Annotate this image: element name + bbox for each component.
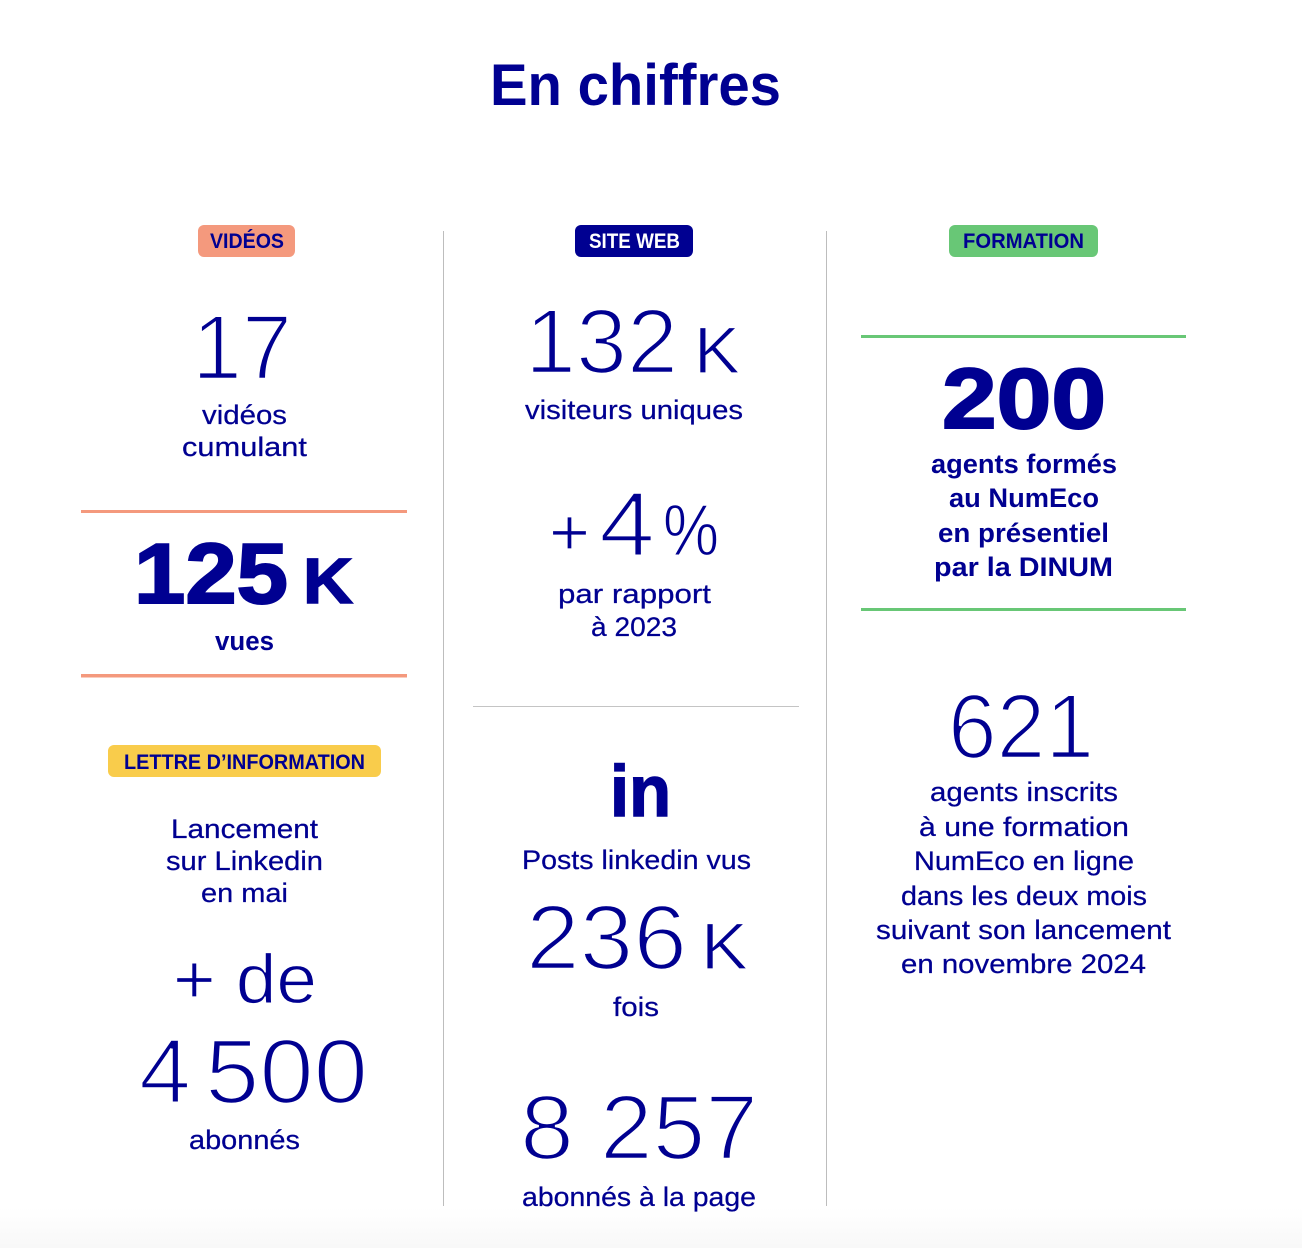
highlighted stat: 125 K vues: [81, 510, 407, 678]
tag: site web: [575, 225, 693, 257]
stat: 8 257 abonnés à la page: 8: [520, 1077, 574, 1179]
text: agents inscrits: suivant son lancement: [876, 915, 1172, 945]
stat: +4 % par rapport à 2023: [549, 474, 719, 642]
text: agents inscrits: agents inscrits: [930, 777, 1118, 807]
stat: 236 K fois: fois: [613, 992, 659, 1022]
text: vidéos cumulant: cumulant: [182, 432, 308, 462]
panel: formation: [861, 225, 1186, 979]
tag: lettre d'information: LETTRE D’INFORMATION: [124, 751, 365, 774]
icon: linkedin: in: [610, 752, 671, 832]
stat: 132 K visiteurs uniques: visiteurs uniques: [525, 395, 743, 425]
highlighted stat: 200 agents formés: en présentiel: [938, 518, 1109, 548]
stat: +4 % par rapport à 2023: à 2023: [591, 612, 677, 642]
stat: 621: 621: [948, 676, 1094, 778]
title: En chiffres: [490, 53, 781, 118]
stat: plus de 4 500 abonnés: + de: [173, 940, 317, 1018]
highlighted stat: 125 K vues: 125: [134, 527, 288, 622]
stat: 8 257 abonnés à la page: [520, 1077, 758, 1212]
highlighted stat: 200 agents formés: au NumEco: [949, 483, 1099, 513]
stat: 8 257 abonnés à la page: 257: [600, 1077, 758, 1179]
stat: 132 K visiteurs uniques: 132: [525, 291, 678, 393]
highlighted stat: 125 K vues: vues: [215, 626, 274, 656]
text: vidéos cumulant: [182, 400, 308, 462]
tag: formation: FORMATION: [963, 230, 1084, 253]
stat: +4 % par rapport à 2023: 4: [599, 474, 655, 576]
text: agents inscrits: NumEco en ligne: [914, 846, 1134, 876]
text: lancement: en mai: [201, 878, 288, 908]
stat: plus de 4 500 abonnés: 500: [205, 1021, 368, 1123]
stat: plus de 4 500 abonnés: [139, 940, 368, 1155]
stat: 236 K fois: K: [701, 909, 748, 983]
tag: vidéos: [198, 225, 295, 257]
text: posts linkedin vus: Posts linkedin vus: [522, 845, 751, 875]
stat: plus de 4 500 abonnés: abonnés: [189, 1125, 300, 1155]
highlighted stat: 200 agents formés: agents formés: [931, 449, 1117, 479]
stat: 236 K fois: [526, 887, 748, 1022]
stat: 236 K fois: 236: [526, 887, 687, 989]
stat: plus de 4 500 abonnés: 4: [139, 1021, 191, 1123]
panel: vidéos: [81, 225, 407, 678]
tag: lettre d'information: [108, 745, 381, 777]
stat: +4 % par rapport à 2023: par rapport: [558, 579, 712, 609]
highlighted stat: 200 agents formés: par la DINUM: [934, 552, 1113, 582]
text: lancement: Lancement: [171, 814, 319, 844]
panel: lettre d'information: [108, 745, 381, 1155]
panel: site web: [520, 225, 758, 1212]
stat: +4 % par rapport à 2023: +: [549, 495, 590, 569]
text: vidéos cumulant: vidéos: [202, 400, 287, 430]
highlighted stat: 125 K vues: K: [303, 545, 353, 617]
text: agents inscrits: en novembre 2024: [901, 949, 1146, 979]
text: agents inscrits: [876, 777, 1172, 979]
stat: +4 % par rapport à 2023: %: [663, 491, 719, 571]
text: lancement: [166, 814, 323, 908]
stat: 132 K visiteurs uniques: K: [694, 313, 740, 387]
highlighted stat: 200 agents formés: 200: [942, 352, 1106, 447]
text: agents inscrits: dans les deux mois: [901, 881, 1147, 911]
stat: 8 257 abonnés à la page: abonnés à la page: [522, 1182, 756, 1212]
text: lancement: sur Linkedin: [166, 846, 323, 876]
highlighted stat: 200 agents formés: [861, 335, 1186, 611]
stat: 132 K visiteurs uniques: [525, 291, 743, 425]
tag: formation: [949, 225, 1098, 257]
tag: site web: SITE WEB: [589, 230, 680, 253]
text: agents inscrits: à une formation: [919, 812, 1129, 842]
stat: 17 vidéos: 17: [192, 297, 292, 399]
tag: vidéos: VIDÉOS: [210, 230, 284, 253]
